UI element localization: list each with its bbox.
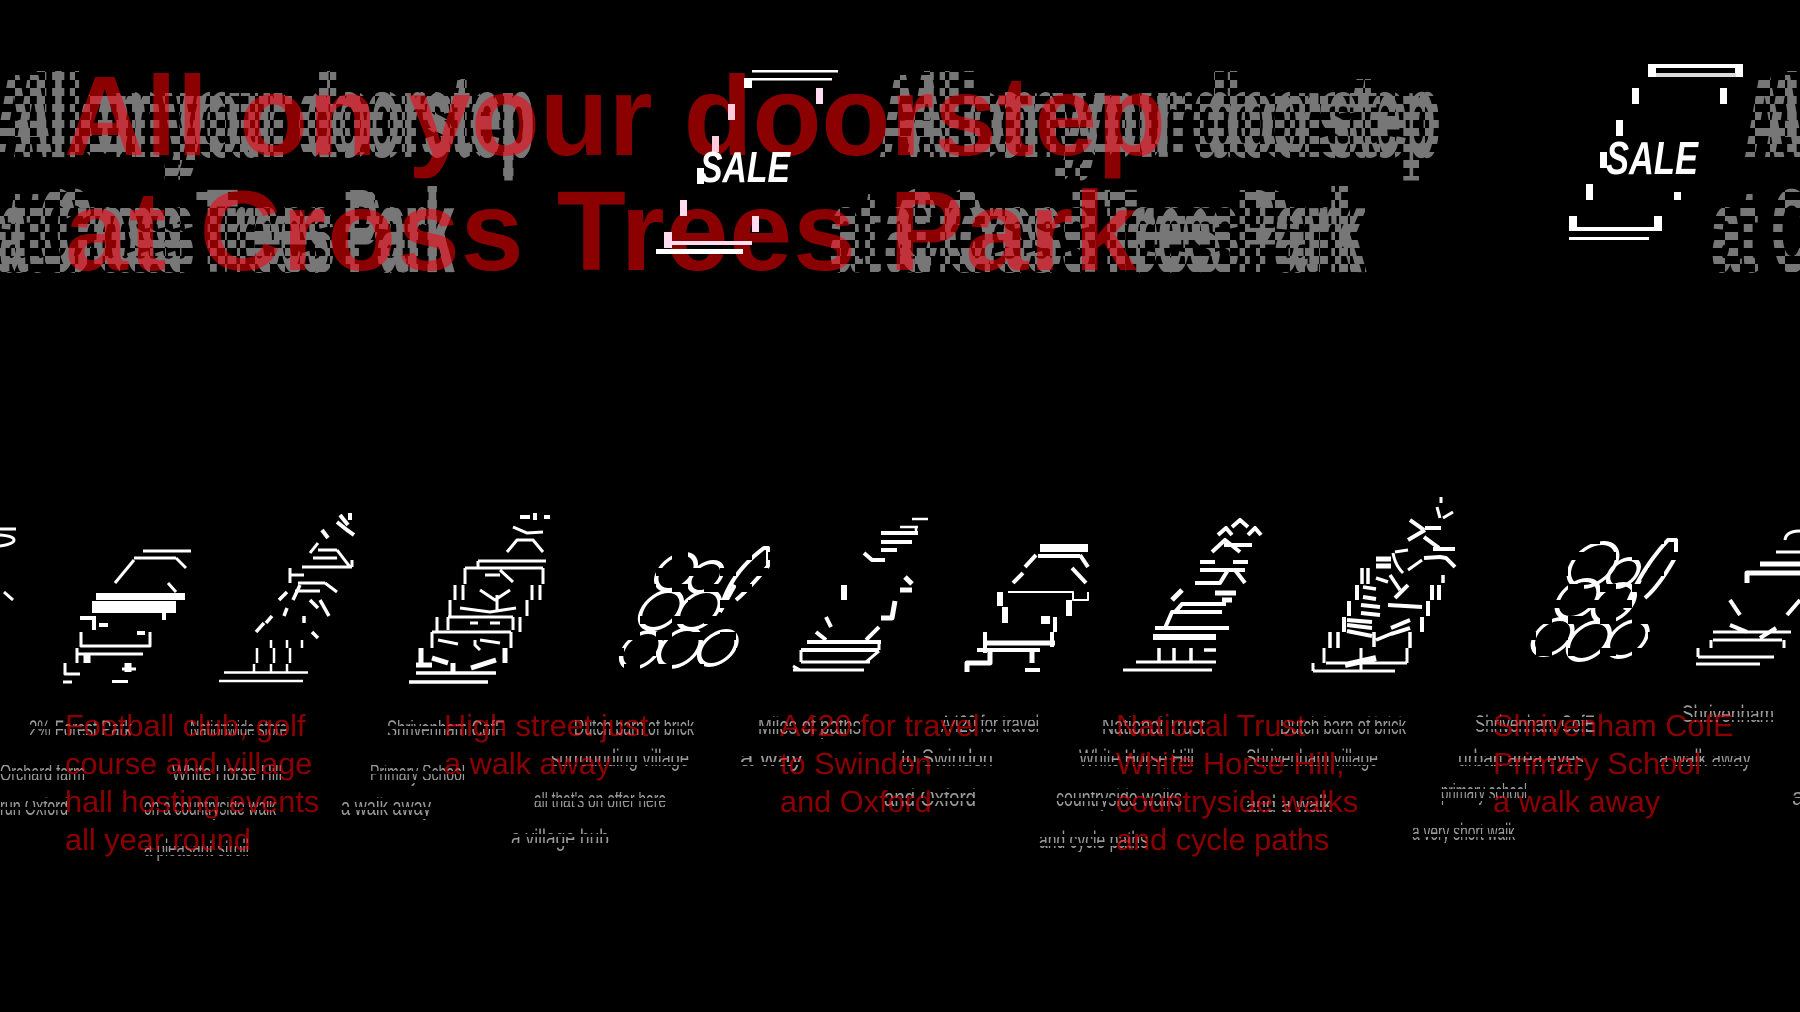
icon: tiered tree: [1123, 520, 1261, 670]
caption: football club, golf course and village hall: [65, 708, 319, 857]
icon: bowl: [793, 519, 928, 670]
ghost captions layer: Nationwide store: [190, 716, 287, 743]
caption: Shrivenham school: a walk away: [1493, 784, 1661, 819]
caption: A420: [780, 708, 980, 819]
ghost captions layer: Dutch barn of brick: [1280, 713, 1407, 740]
ghost captions layer: White Horse Hill: [1079, 745, 1194, 772]
ghost title layer, first tile set: at Cross Trees Park: [0, 168, 453, 294]
ghost captions layer: A420 for travel: [941, 711, 1039, 738]
caption: football club, golf course and village hall: hall hosting events: [65, 784, 319, 819]
ghost captions layer: on a countryside walk: [144, 794, 277, 821]
icon row: [0, 497, 1800, 682]
caption: A420: A420 for travel: [780, 708, 980, 743]
ghost captions layer: run Oxford: [0, 794, 68, 821]
caption: A420: and Oxford: [780, 784, 932, 819]
ghost captions layer: a village hub: [511, 825, 609, 852]
ghost captions layer: surrounding village: [551, 745, 689, 772]
ghost captions layer: a pleasant stroll: [144, 835, 249, 862]
caption: football club, golf course and village hall: all year round: [65, 822, 251, 857]
icon: shop stack with plant: [409, 513, 550, 682]
caption: National Trust: countryside walks: [1116, 784, 1358, 819]
caption: National Trust: National Trust: [1116, 708, 1306, 743]
icon: car: [63, 551, 191, 682]
ghost captions layer: and Oxford: [884, 785, 976, 812]
ghost captions layer: [0, 701, 1800, 862]
ghost captions layer: a way: [740, 745, 803, 772]
ghost captions layer: White Horse Hill: [172, 760, 282, 787]
ghost captions layer: all that's on offer here: [534, 787, 666, 814]
ghost title layer, first tile set: All on your doorstep: [0, 53, 534, 179]
ghost title layer, second tile set: at Cross Trees Park: [0, 168, 453, 294]
icon: second flower cluster: [1524, 540, 1689, 660]
ghost title layer, first tile set: [0, 71, 1800, 273]
logo: centre sale sign: [656, 70, 838, 254]
ghost captions layer: Miles of paths: [758, 713, 861, 740]
icon: cup with saucer: [1696, 531, 1800, 664]
caption: A420: to Swindon: [780, 746, 932, 781]
ghost captions layer: Dutch barn of brick: [574, 714, 695, 741]
caption: Shrivenham school: Primary School: [1493, 746, 1701, 781]
icon: flower cluster: [615, 548, 777, 668]
ghost captions layer: and a walk: [1246, 791, 1333, 818]
logo: right sale sign: [1569, 64, 1743, 240]
caption: football club, golf course and village hall: Football club, golf: [65, 708, 306, 743]
ghost captions layer: primary school: [1441, 779, 1527, 806]
caption: National Trust: White Horse Hill,: [1116, 746, 1344, 781]
icon: open books: [1313, 497, 1455, 671]
caption: Shrivenham school: [1493, 708, 1734, 819]
caption: high street: a walk away: [444, 746, 612, 781]
caption: high street: High street just: [444, 708, 649, 743]
title: [64, 53, 1166, 294]
caption: Shrivenham school: Shrivenham CofE: [1493, 708, 1734, 743]
icon: bench: [967, 548, 1088, 672]
ghost captions layer: Shrivenham CofE: [387, 716, 505, 743]
ghost captions layer: countryside walks: [1056, 785, 1182, 812]
ghost captions layer: Shrivenham village: [1246, 745, 1378, 772]
ghost captions layer: urban area eyes: [1458, 745, 1584, 772]
ghost captions layer: to Swindon: [901, 745, 993, 772]
caption: National Trust: [1116, 708, 1358, 857]
caption: football club, golf course and village hall: course and village: [65, 746, 312, 781]
ghost captions layer: Orchard farm: [0, 760, 85, 787]
caption: high street: [444, 708, 649, 781]
ghost captions layer: and cycle paths: [1039, 827, 1148, 854]
caption: National Trust: and cycle paths: [1116, 822, 1329, 857]
icon: tree on a path: [219, 513, 354, 681]
ghost title layer, second tile set: [0, 71, 1797, 273]
ghost captions layer: Primary School: [370, 760, 465, 787]
ghost captions layer: 2% Forest Park: [29, 716, 133, 743]
logo: right sale sign: SALE: [1606, 132, 1699, 184]
ghost title layer, second tile set: All on your doorstep: [14, 53, 534, 179]
ghost captions layer: a walk away: [1659, 745, 1751, 772]
icon: partial at left edge: [0, 529, 16, 600]
title: at Cross Trees Park: [65, 168, 1137, 294]
title: All on your doorstep: [64, 53, 1166, 179]
ghost captions layer: a walk away: [341, 794, 431, 821]
ghost captions layer: Shrivenham CofE: [1475, 711, 1595, 738]
ghost captions layer: a very short walk: [1412, 819, 1516, 846]
logo: centre sale sign: SALE: [700, 143, 791, 192]
ghost captions layer: National Trust: [1102, 713, 1205, 740]
